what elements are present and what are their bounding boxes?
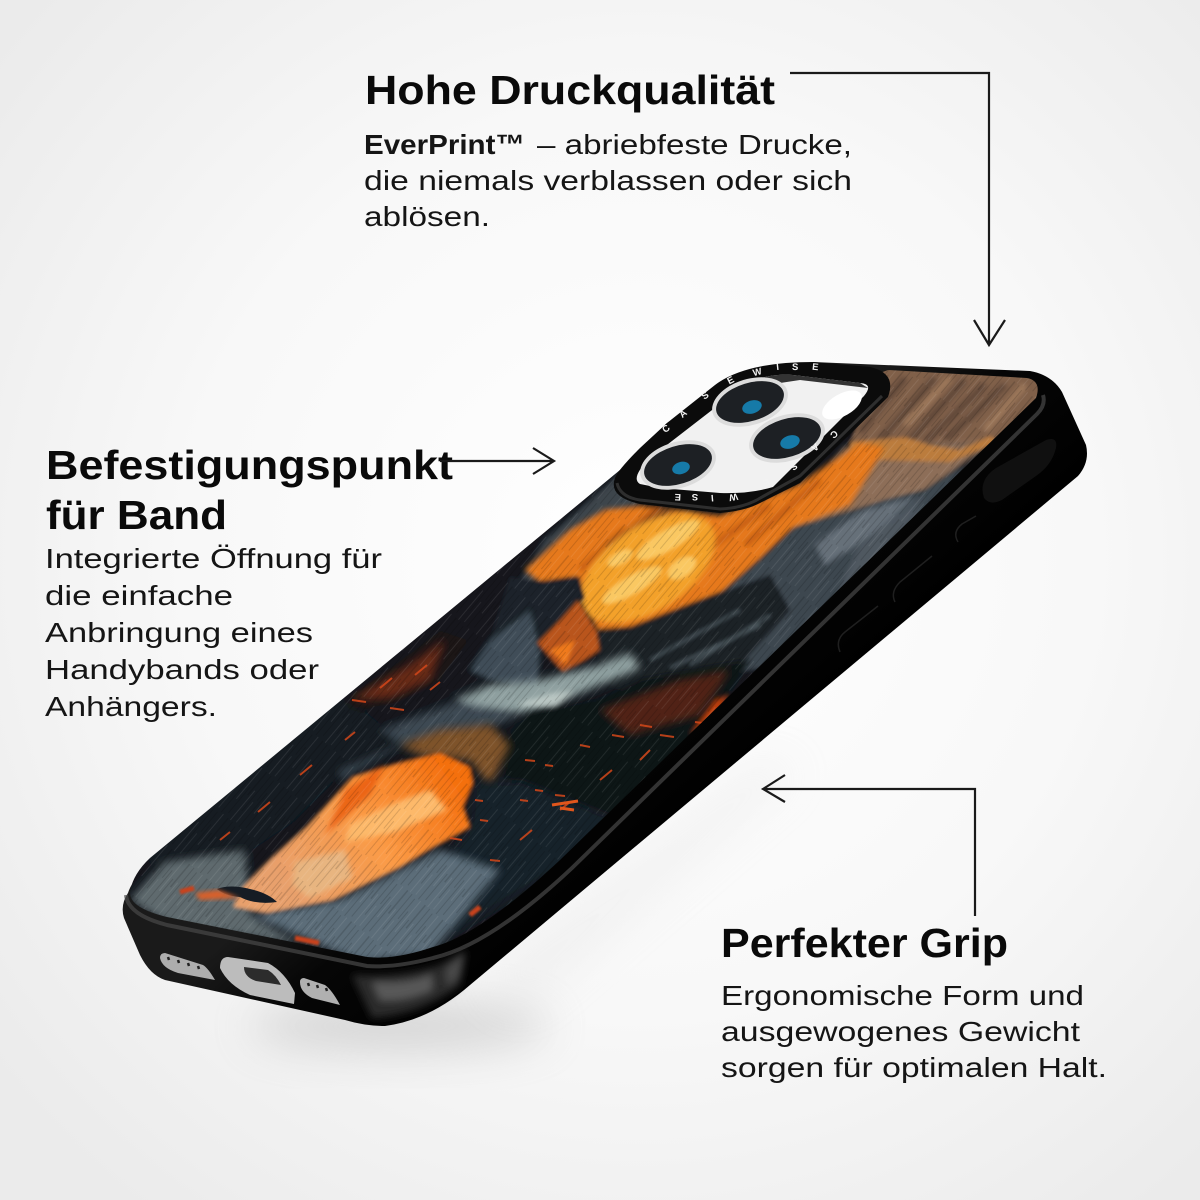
charging port (220, 957, 295, 1004)
bezel lettering: S (700, 390, 711, 402)
arrow: strap (440, 448, 554, 474)
brush texture (130, 370, 1040, 960)
right lens (743, 405, 831, 471)
callout: strap heading: Befestigungspunkt (46, 442, 453, 488)
grey-blue lower left (130, 850, 300, 945)
top lens (706, 369, 794, 435)
bezel lettering: I (776, 362, 780, 373)
lower red marks (180, 888, 480, 943)
callout: strap text (45, 543, 382, 722)
bezel lettering: C (660, 423, 673, 436)
callout: grip text: sorgen für optimalen Halt. (721, 1052, 1107, 1083)
left lens (634, 432, 722, 498)
bezel lettering: E (761, 476, 771, 489)
grey-brown haze (790, 440, 995, 530)
callout: strap text: Handybands oder (45, 654, 319, 685)
far-left slate (330, 702, 520, 780)
upper brown sky (849, 370, 1038, 444)
phone shadow (250, 760, 800, 1050)
callout: strap text: Integrierte Öffnung für (45, 543, 382, 574)
ember forest (600, 670, 730, 735)
bezel lettering (660, 362, 840, 503)
bezel lettering: W (752, 366, 763, 379)
ridge highlights (650, 610, 770, 668)
camera bump (614, 362, 890, 513)
callout: print quality text: ablösen. (364, 201, 490, 232)
callout: strap text: Anbringung eines (45, 617, 313, 648)
near ridge dark (597, 575, 790, 700)
sky amber strokes (580, 480, 820, 570)
bezel lettering: S (792, 362, 798, 373)
bezel lettering: C (827, 427, 840, 440)
callout: print quality heading: Hohe Druckqualität (365, 67, 775, 113)
reflection bright core (345, 790, 447, 842)
bezel lettering: W (728, 490, 739, 503)
callout: print quality text: EverPrint™ (364, 129, 525, 160)
callout: strap text: die einfache (45, 580, 233, 611)
arrow: print quality (790, 73, 1005, 345)
reflection deep orange (325, 765, 385, 835)
mist band (455, 653, 640, 715)
bottom ports (160, 953, 340, 1005)
bezel lettering: I (710, 492, 714, 503)
sun glow (578, 508, 718, 625)
reflection lower pale (292, 850, 352, 898)
upper-left dark water (149, 705, 401, 864)
bezel lettering: A (808, 440, 821, 453)
side switch (982, 439, 1056, 503)
boat silhouette (217, 886, 277, 903)
bezel lettering: S (692, 491, 698, 502)
lower right navy water (454, 776, 608, 934)
dark sky strokes (610, 510, 670, 550)
bright fleck patch (552, 801, 578, 810)
corner gloss (352, 950, 466, 1018)
artwork (130, 370, 1038, 958)
callout: grip text: Ergonomische Form und (721, 980, 1084, 1011)
bezel (614, 362, 890, 513)
callout: print quality text: – abriebfeste Drucke, (537, 129, 852, 160)
camera window (637, 375, 868, 493)
arrow: grip (763, 775, 975, 916)
window shade (747, 375, 868, 388)
left ember dark (353, 637, 449, 714)
slate flank (470, 610, 540, 690)
dark peak (492, 576, 586, 637)
amber cloud (850, 436, 1000, 462)
bezel lettering: E (674, 491, 681, 502)
callout: print quality text: die niemals verblassen oder sich (364, 165, 852, 196)
bezel lettering: A (677, 408, 690, 421)
callout: grip text (721, 980, 1107, 1083)
art painting (130, 370, 1038, 958)
callout: print quality text (364, 129, 852, 232)
art base (130, 428, 986, 957)
reflection dim top (400, 725, 510, 785)
flash (817, 384, 867, 426)
central dark forest (500, 660, 750, 820)
distant grey mountains (722, 466, 964, 676)
left speaker (160, 953, 215, 980)
main orange reflection (233, 753, 473, 913)
bezel lettering: E (725, 374, 736, 387)
callout: strap heading (46, 442, 453, 538)
side buttons (838, 516, 976, 652)
case lip highlight (126, 395, 1044, 966)
callout: strap text: Anhängers. (45, 691, 217, 722)
paint flecks (220, 665, 709, 861)
callout: grip text: ausgewogenes Gewicht (721, 1016, 1080, 1047)
bezel lettering: E (812, 362, 819, 373)
grey-slate upper left (520, 472, 640, 582)
phone case (100, 350, 1087, 1026)
boat reflection (195, 890, 240, 900)
right speaker (300, 978, 340, 1005)
orange sky (525, 443, 885, 630)
callout: strap heading: für Band (46, 492, 227, 538)
callout: grip heading: Perfekter Grip (721, 920, 1008, 966)
bezel lettering: S (788, 460, 799, 472)
bezel shine (617, 396, 882, 509)
red glow (690, 695, 730, 735)
ember slope (537, 600, 600, 672)
sun highlights (600, 518, 702, 606)
grey-blue lower water (250, 850, 500, 962)
case body (123, 362, 1087, 1026)
